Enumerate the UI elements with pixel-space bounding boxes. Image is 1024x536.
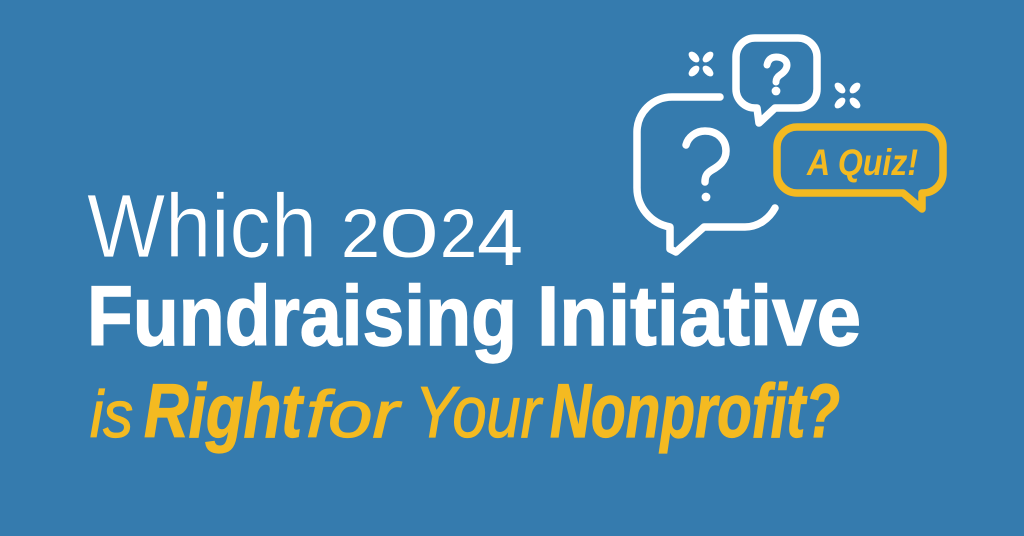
title line 1: 4	[477, 193, 523, 282]
title line 1: 0	[379, 195, 439, 272]
title line 1	[87, 177, 523, 282]
subtitle script line: is	[90, 377, 133, 451]
subtitle script line: Right	[144, 369, 304, 454]
icon: large white question bubble	[637, 97, 775, 252]
title line 1: 2	[341, 195, 380, 272]
icon: white sparkle left	[687, 50, 715, 78]
title line 2: Fundraising	[87, 269, 517, 363]
subtitle script line: Your	[415, 373, 544, 453]
icon: white sparkle right	[833, 81, 862, 110]
icon: small white question bubble	[736, 38, 817, 123]
subtitle script line: Nonprofit?	[550, 369, 840, 454]
title line 1: 2	[440, 195, 477, 272]
subtitle script line: for	[306, 377, 403, 451]
callout: yellow A Quiz bubble	[777, 127, 943, 209]
subtitle script line	[90, 369, 840, 454]
callout: yellow A Quiz bubble: A Quiz!	[806, 142, 918, 183]
title line 1: Which	[87, 177, 317, 277]
title line 2: Initiative	[537, 269, 861, 363]
title line 2	[87, 269, 861, 363]
